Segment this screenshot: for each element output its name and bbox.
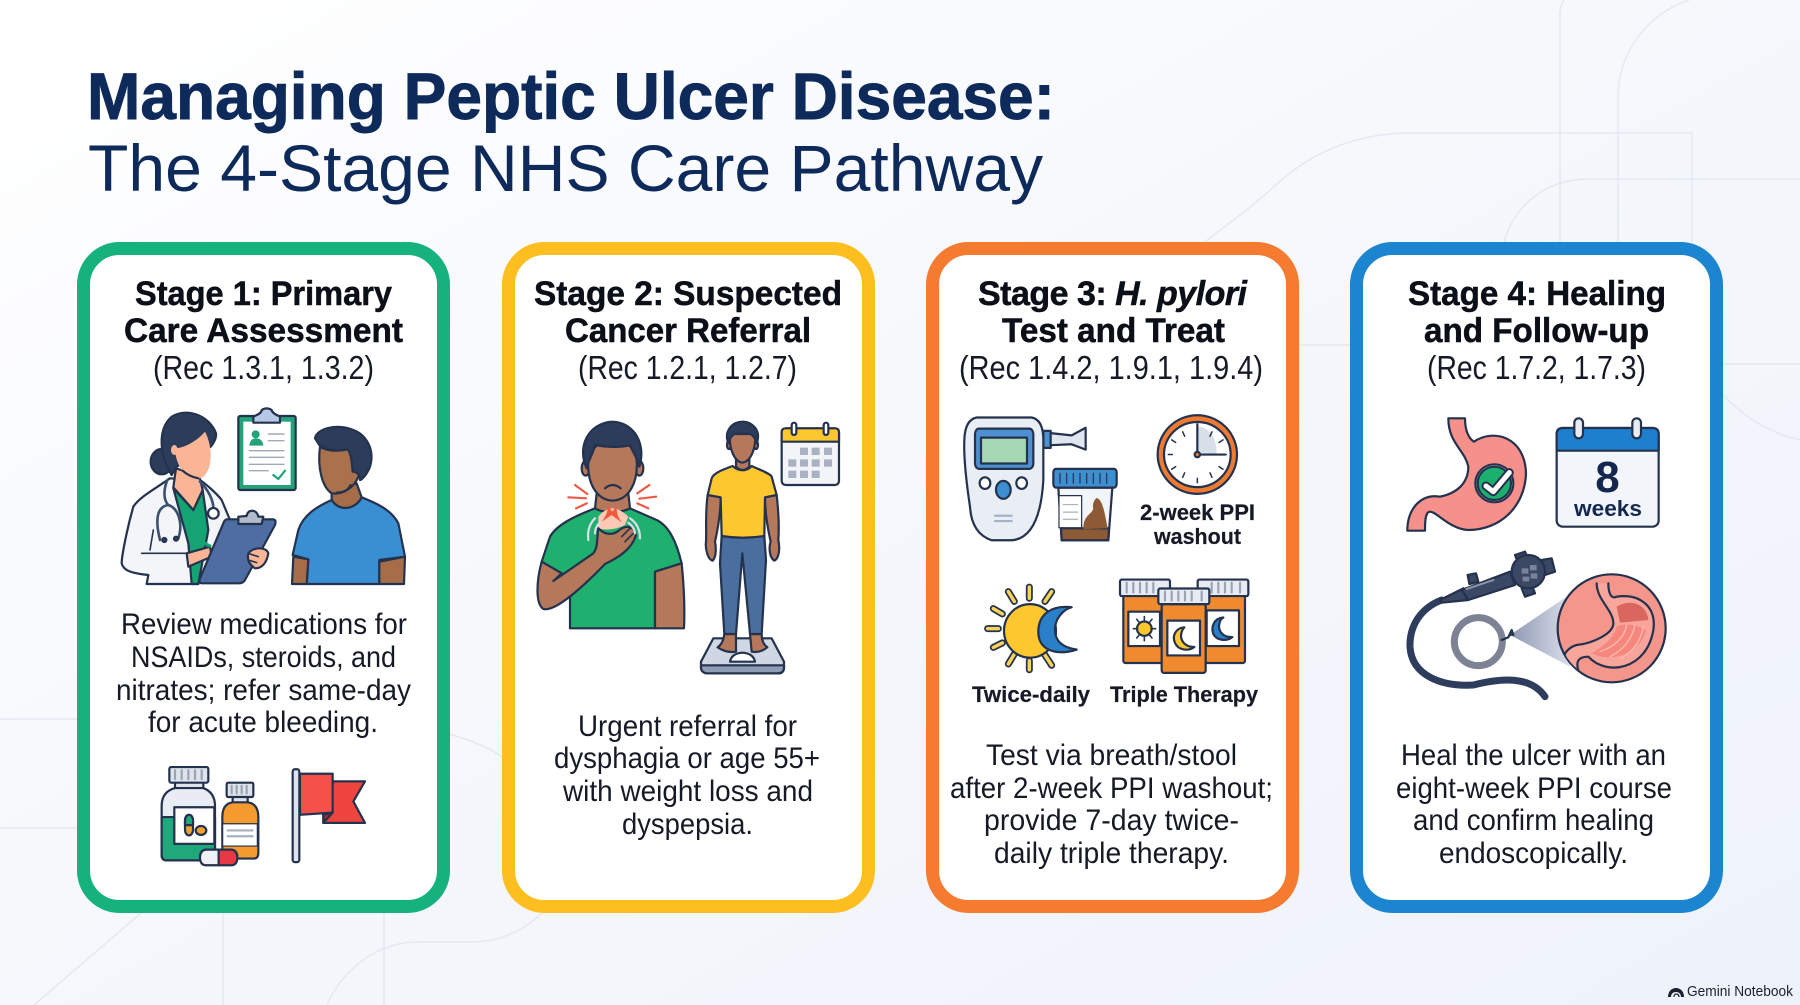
body text: stage 2: with weight loss and (562, 775, 813, 808)
illustration: doctor (122, 413, 276, 584)
body text: stage 2 (554, 710, 820, 841)
heading: stage 1: Stage 1: Primary (135, 275, 392, 313)
title (87, 59, 1055, 205)
heading: stage 3 (959, 275, 1263, 386)
icon: sun and moon (988, 587, 1077, 670)
body text: stage 3: daily triple therapy. (994, 837, 1229, 870)
panel: stage 1 (84, 248, 444, 906)
icon: patient record clipboard (238, 408, 296, 490)
body text: stage 3: Test via breath/stool (986, 739, 1237, 772)
body text: stage 4: and confirm healing (1413, 804, 1654, 837)
icon: 8 weeks calendar: weeks (1573, 496, 1642, 521)
icon: three pill bottles (1120, 580, 1248, 673)
illustration: man with throat pain (537, 422, 684, 628)
icon: healed stomach (1407, 418, 1526, 531)
icon: calendar (782, 423, 839, 485)
illustration: endoscope and stomach view (1410, 552, 1666, 697)
heading: stage 2 (534, 275, 842, 386)
label: twice-daily: Twice-daily (972, 682, 1091, 707)
title: Managing Peptic Ulcer Disease: (87, 59, 1055, 133)
body text: stage 1: NSAIDs, steroids, and (131, 641, 396, 674)
heading: stage 4 (1408, 275, 1666, 386)
label: 2-week PPI washout: washout (1153, 524, 1242, 549)
icon: breath test device (964, 418, 1086, 540)
body text: stage 1 (116, 608, 411, 739)
heading: stage 1 (124, 275, 403, 386)
heading: stage 2: Cancer Referral (565, 312, 811, 350)
heading: stage 3: Stage 3: H. pylori (978, 275, 1249, 313)
panel: stage 2 (508, 248, 868, 906)
label: triple therapy: Triple Therapy (1110, 682, 1259, 707)
icon: clock (1158, 415, 1237, 494)
heading: stage 1: Care Assessment (124, 312, 403, 350)
body text: stage 1: nitrates; refer same-day (116, 674, 411, 707)
panel: stage 4 (1356, 248, 1716, 906)
body text: stage 2: dysphagia or age 55+ (554, 742, 820, 775)
illustration: patient (292, 427, 405, 584)
heading: stage 2: (Rec 1.2.1, 1.2.7) (578, 349, 797, 386)
icon: 8 weeks calendar (1557, 418, 1659, 527)
title: The 4-Stage NHS Care Pathway (88, 131, 1043, 205)
heading: stage 3: (Rec 1.4.2, 1.9.1, 1.9.4) (959, 349, 1263, 386)
icon: stool sample cup (1053, 469, 1117, 540)
label: 2-week PPI washout (1140, 500, 1255, 549)
body text: stage 3: provide 7-day twice- (984, 804, 1239, 837)
heading: stage 4: and Follow-up (1424, 312, 1649, 350)
heading: stage 2: Stage 2: Suspected (534, 275, 842, 313)
body text: stage 2: dyspepsia. (622, 808, 753, 841)
body text: stage 1: for acute bleeding. (148, 706, 378, 739)
heading: stage 3: Test and Treat (1002, 312, 1225, 350)
watermark: Gemini Notebook: Gemini Notebook (1687, 984, 1794, 1000)
icon: 8 weeks calendar: 8 (1595, 453, 1620, 502)
body text: stage 2: Urgent referral for (578, 710, 797, 743)
body text: stage 4: eight-week PPI course (1396, 772, 1672, 805)
body text: stage 1: Review medications for (121, 608, 407, 641)
icon: red flag (293, 769, 365, 862)
icon: medication bottles (162, 767, 258, 865)
body text: stage 4: Heal the ulcer with an (1401, 739, 1666, 772)
heading: stage 1: (Rec 1.3.1, 1.3.2) (153, 349, 374, 386)
body text: stage 4: endoscopically. (1439, 837, 1628, 870)
label: 2-week PPI washout: 2-week PPI (1140, 500, 1255, 525)
body text: stage 3: after 2-week PPI washout; (950, 772, 1273, 805)
heading: stage 4: (Rec 1.7.2, 1.7.3) (1427, 349, 1646, 386)
body text: stage 4 (1396, 739, 1672, 870)
panel: stage 3 (932, 248, 1292, 906)
illustration: man on weighing scale (701, 422, 784, 673)
heading: stage 4: Stage 4: Healing (1408, 275, 1666, 313)
body text: stage 3 (950, 739, 1273, 870)
